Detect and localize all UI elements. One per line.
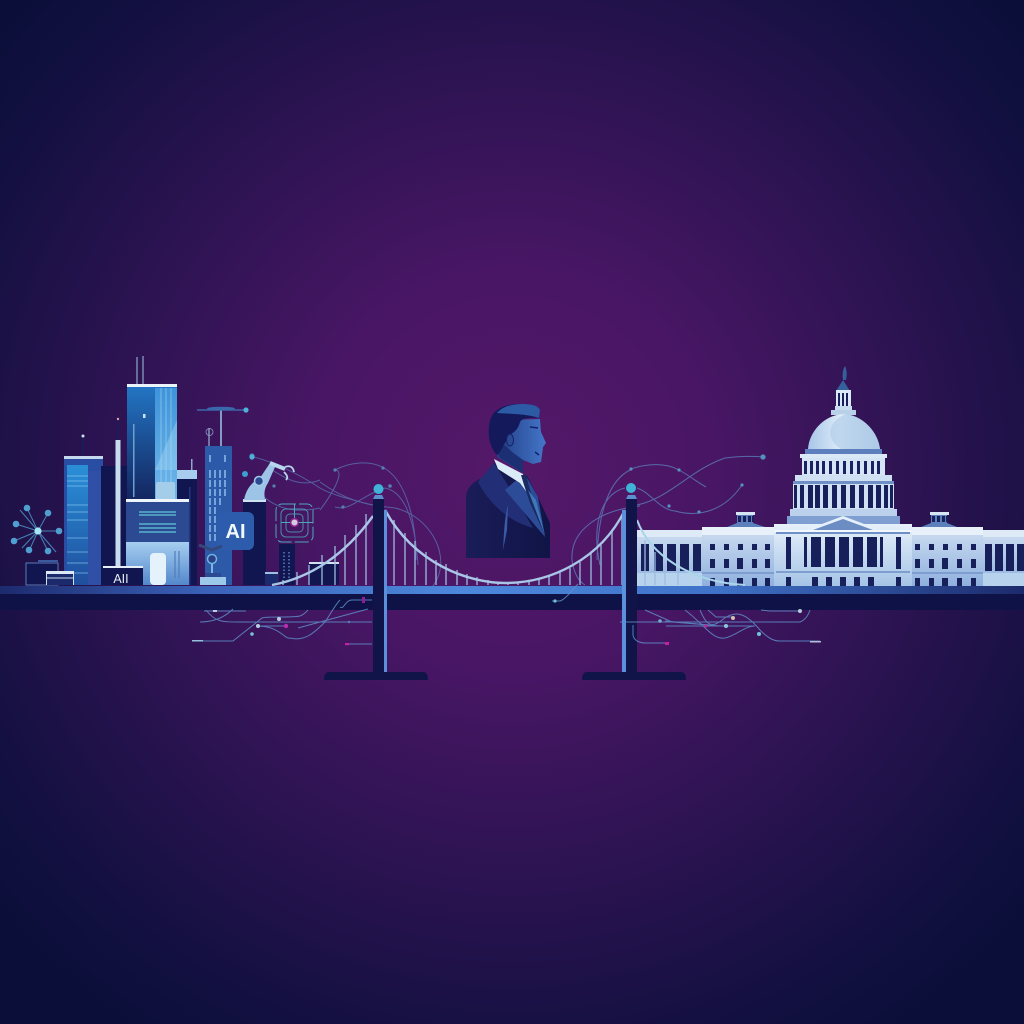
robot arm <box>242 454 294 500</box>
building A <box>64 434 103 585</box>
right dark building <box>177 459 197 585</box>
hair <box>489 404 540 455</box>
hangers <box>283 514 678 585</box>
nodes <box>242 453 392 509</box>
far right wing <box>983 530 1024 586</box>
person bust <box>466 404 550 558</box>
dome <box>805 414 882 454</box>
left city skyline <box>11 356 339 586</box>
tower with windows <box>197 407 249 585</box>
suit <box>466 463 550 558</box>
central portico <box>774 516 912 586</box>
main cables <box>272 516 373 585</box>
lapel shading <box>478 463 533 528</box>
AI badge <box>217 512 254 550</box>
nodes <box>629 454 766 514</box>
bridge <box>0 483 1024 680</box>
neck and face <box>497 419 546 473</box>
pins <box>553 599 821 645</box>
mid building <box>126 499 189 585</box>
ear <box>506 434 514 446</box>
shirt collar <box>494 459 531 498</box>
circuit lines above bridge: left <box>242 453 441 606</box>
AII sign: AII <box>113 572 129 586</box>
AI badge: AI <box>226 521 246 543</box>
small buildings <box>26 560 339 585</box>
network icon <box>11 505 62 554</box>
capitol building <box>637 366 1024 586</box>
dark tower behind <box>101 466 131 585</box>
lower drum <box>787 484 900 524</box>
AII sign <box>103 566 143 586</box>
upper drum <box>793 454 894 484</box>
brow shading <box>530 427 539 455</box>
dark column under robot arm <box>243 499 266 585</box>
target icon <box>276 504 313 542</box>
far left wing <box>637 530 703 586</box>
right wing <box>912 512 983 586</box>
circuit lines below bridge: left <box>192 597 372 645</box>
left tower <box>324 484 428 680</box>
neck shadow <box>497 445 523 473</box>
road deck <box>0 586 1024 610</box>
main tower <box>127 356 177 501</box>
left wing <box>702 512 774 586</box>
right tower <box>582 483 686 680</box>
pins <box>192 597 365 645</box>
circuit lines below bridge: right <box>552 584 821 645</box>
circuit lines above bridge: right <box>572 454 766 585</box>
small robot base <box>199 545 226 585</box>
white pole <box>116 418 120 567</box>
dark tower with dots <box>279 544 295 585</box>
tie <box>521 475 545 535</box>
statue and lantern <box>831 366 856 415</box>
